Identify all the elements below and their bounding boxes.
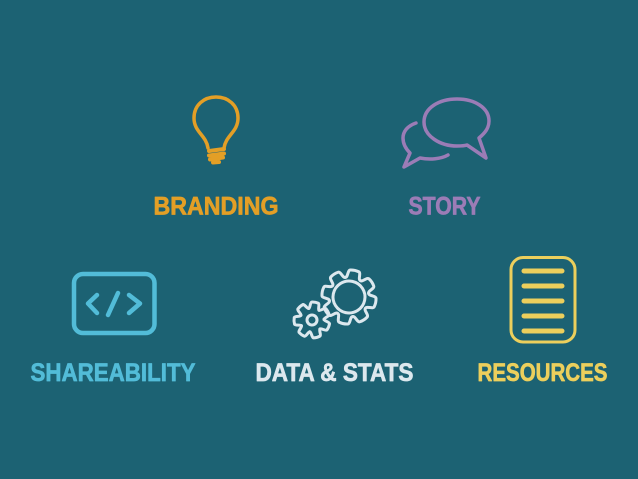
heading: shareability: SHAREABILITY xyxy=(30,359,196,387)
icon: code window xyxy=(74,274,154,333)
icon: light bulb xyxy=(194,97,238,162)
heading: branding: BRANDING xyxy=(154,192,278,220)
heading: resources: RESOURCES xyxy=(478,359,608,387)
heading: data and stats: DATA & STATS xyxy=(256,359,414,387)
panel: story xyxy=(403,99,489,220)
icon: speech bubbles xyxy=(403,99,489,167)
panel: shareability xyxy=(30,274,196,387)
icon: document list xyxy=(511,258,575,342)
icon: gears xyxy=(290,265,381,341)
heading: story: STORY xyxy=(408,192,481,220)
panel: branding xyxy=(154,97,278,220)
panel: resources xyxy=(478,258,608,387)
panel: data and stats xyxy=(256,265,414,387)
